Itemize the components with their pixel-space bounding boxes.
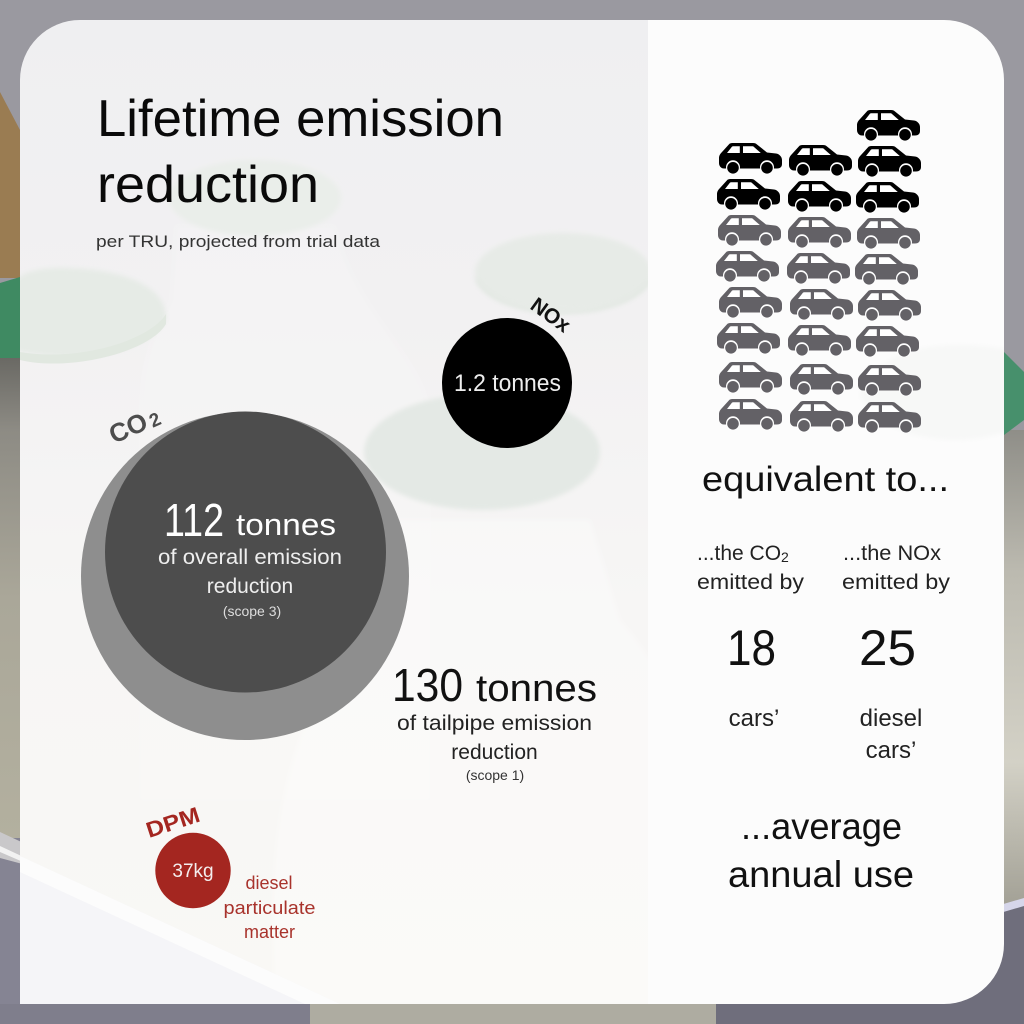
text: 130 tonnes of tailpipe emission reduction: tonnes — [476, 668, 597, 710]
closing text: average annual use: annual use — [728, 854, 914, 895]
column: NOx equivalence: ...the NOx — [843, 542, 942, 565]
text: 112 tonnes of overall emission reduction — [158, 494, 342, 619]
text: 130 tonnes of tailpipe emission reduction: of tailpipe emission — [397, 712, 592, 735]
text: 130 tonnes of tailpipe emission reduction: 130 — [392, 659, 463, 711]
title: Lifetime emission — [97, 90, 504, 148]
column: NOx equivalence: 25 — [859, 620, 916, 676]
label: CO2: CO — [104, 406, 152, 449]
icon grid: black cars — [717, 110, 921, 213]
column: NOx equivalence — [842, 542, 951, 764]
faded photo: bottle cap seen through the right panel — [860, 345, 1010, 440]
text: 112 tonnes of overall emission reduction: 112 — [164, 494, 224, 546]
bubble: DPM — [155, 833, 231, 908]
text: 130 tonnes of tailpipe emission reduction: (scope 1) — [466, 767, 524, 783]
text: 130 tonnes of tailpipe emission reduction — [392, 659, 597, 783]
column: NOx equivalence: diesel — [860, 705, 922, 732]
text: 130 tonnes of tailpipe emission reduction: reduction — [451, 741, 538, 764]
closing text: average annual use: ...average — [741, 806, 902, 847]
icon grid: grey cars — [716, 215, 921, 433]
column: NOx equivalence: emitted by — [842, 571, 951, 594]
column: CO2 equivalence — [697, 542, 805, 732]
column: NOx equivalence: cars’ — [866, 737, 916, 764]
bubble: NOx — [442, 318, 572, 448]
faded photo: bottles seen through the left panel — [20, 234, 648, 1004]
text: diesel particulate matter: particulate — [224, 898, 316, 918]
text: 37kg: 37kg — [172, 861, 214, 882]
label: DPM: DPM — [143, 802, 203, 843]
heading: equivalent to: equivalent to... — [702, 460, 949, 499]
label: CO2: 2 — [146, 409, 164, 432]
title: reduction — [97, 156, 319, 214]
text: diesel particulate matter: matter — [244, 922, 295, 942]
column: CO2 equivalence: ...the CO — [697, 542, 781, 565]
bubble: CO2 overall — [105, 412, 386, 692]
column: CO2 equivalence: 18 — [727, 620, 776, 676]
text: diesel particulate matter: diesel — [245, 873, 293, 893]
label: NOx: NOx — [526, 293, 575, 338]
subtitle: per TRU, projected from trial data — [96, 232, 381, 251]
bubble: CO2 tailpipe — [81, 412, 409, 740]
text: 1.2 tonnes: 1.2 tonnes — [454, 370, 561, 397]
text: 112 tonnes of overall emission reduction: tonnes — [236, 507, 336, 542]
column: CO2 equivalence: 2 — [781, 549, 789, 565]
text: 112 tonnes of overall emission reduction: reduction — [207, 575, 293, 598]
column: CO2 equivalence: cars’ — [729, 705, 779, 732]
text: 112 tonnes of overall emission reduction: (scope 3) — [223, 603, 281, 619]
column: CO2 equivalence: emitted by — [697, 571, 805, 594]
text: 112 tonnes of overall emission reduction: of overall emission — [158, 546, 342, 569]
